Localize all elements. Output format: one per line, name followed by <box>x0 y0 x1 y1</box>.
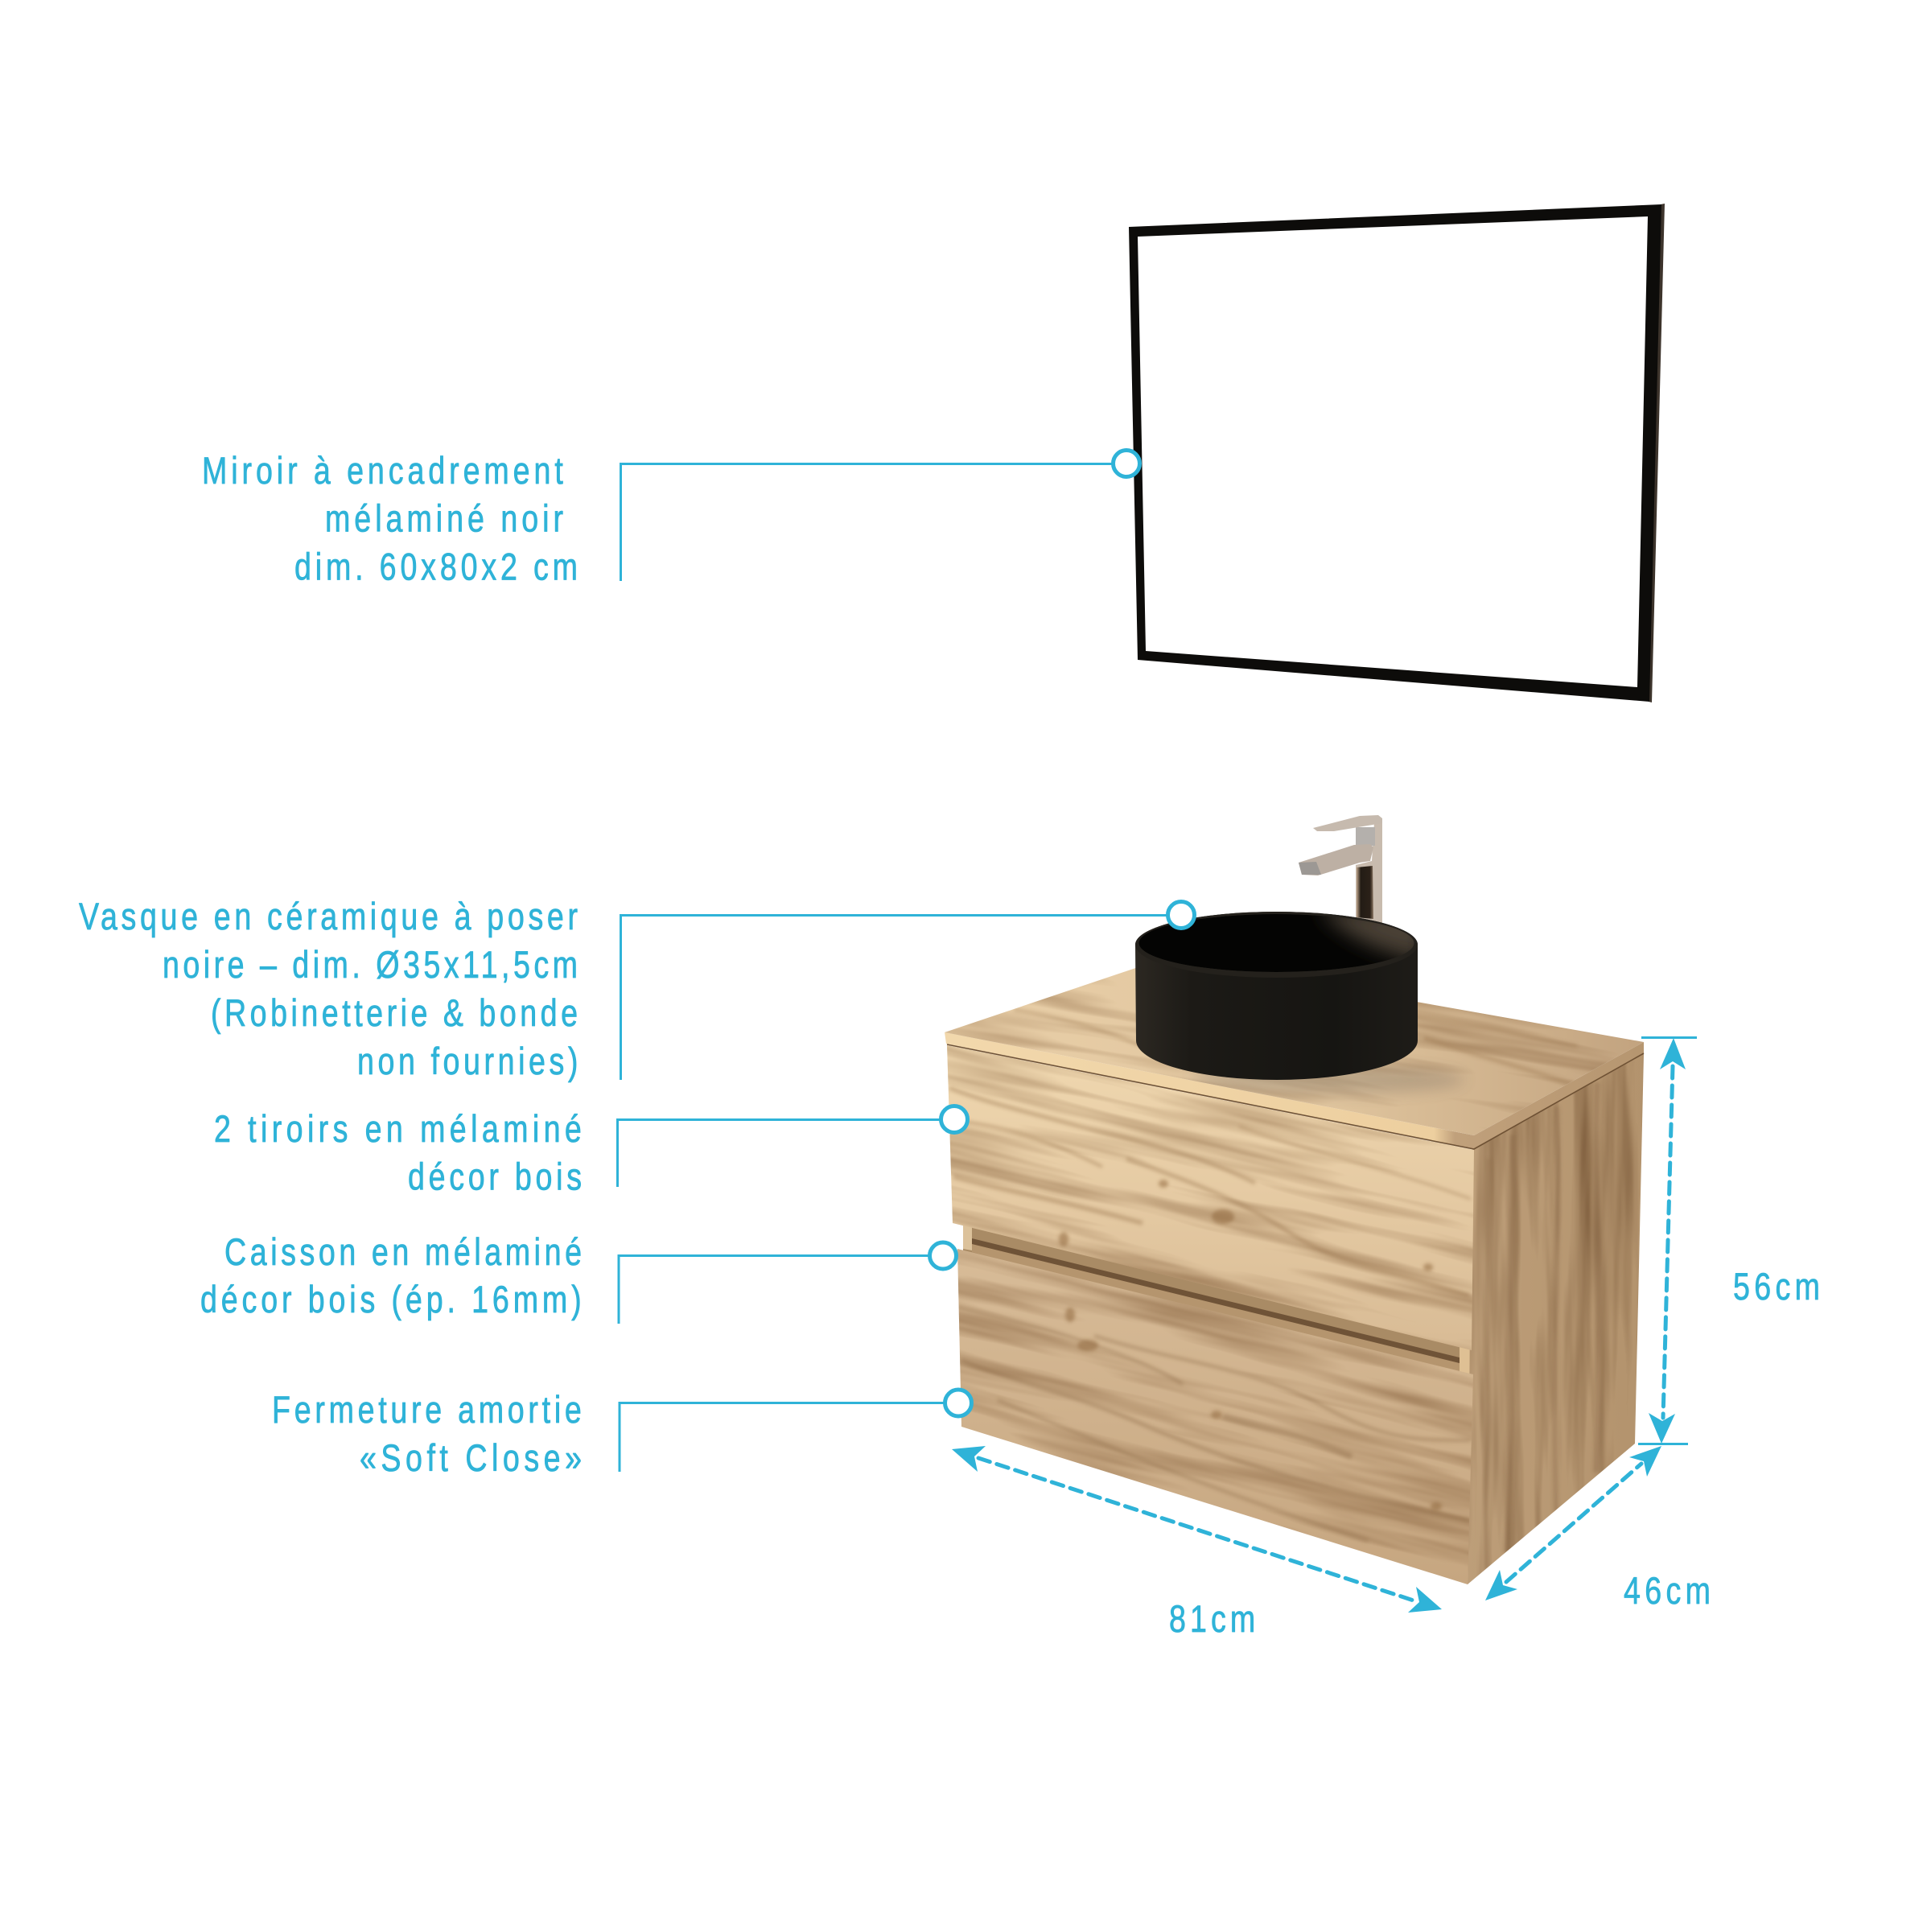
marker tiroirs <box>941 1106 967 1133</box>
mirror <box>1129 204 1665 702</box>
label tiroirs: 2 tiroirs en mélaminé <box>214 1108 582 1151</box>
countertop top face <box>945 968 1644 1135</box>
height ticks <box>1638 1038 1697 1444</box>
label fermeture: «Soft Close» <box>360 1437 582 1480</box>
handle groove <box>963 1219 1474 1378</box>
cabinet recess behind drawers <box>963 1215 1471 1384</box>
depth arrowheads <box>1485 1446 1661 1600</box>
marker miroir <box>1114 451 1139 476</box>
label fermeture <box>272 1389 582 1480</box>
height label: 56cm <box>1733 1266 1820 1308</box>
height arrowheads <box>1649 1038 1686 1444</box>
side panel <box>1464 1046 1649 1593</box>
mirror frame <box>1129 204 1661 702</box>
label vasque: non fournies) <box>357 1040 578 1083</box>
basin interior <box>1139 914 1414 972</box>
faucet dark slot <box>1357 866 1373 919</box>
faucet <box>1299 815 1382 925</box>
marker vasque <box>1168 901 1194 929</box>
marker caisson <box>930 1242 956 1269</box>
label miroir: Miroir à encadrement <box>202 450 563 492</box>
mirror side edge <box>1649 204 1665 702</box>
label vasque: (Robinetterie & bonde <box>211 992 578 1035</box>
label miroir: dim. 60x80x2 cm <box>294 546 578 589</box>
vanity cabinet <box>945 968 1645 1584</box>
leader line fermeture <box>620 1403 958 1472</box>
label miroir: mélaminé noir <box>325 498 563 541</box>
leader line miroir <box>621 463 1126 581</box>
basin shadow on countertop <box>1191 1065 1464 1094</box>
faucet spout tip <box>1299 862 1321 875</box>
callout: tiroirs <box>214 1106 967 1199</box>
lower drawer <box>957 1249 1473 1584</box>
width label: 81cm <box>1169 1598 1255 1641</box>
shadow line under countertop <box>947 1044 1644 1149</box>
label vasque <box>79 896 578 1083</box>
depth dashed line <box>1506 1464 1641 1582</box>
leader line tiroirs <box>618 1120 954 1187</box>
label vasque: Vasque en céramique à poser <box>79 896 578 938</box>
faucet column <box>1356 822 1382 925</box>
countertop front edge <box>945 1032 1644 1149</box>
callout: vasque <box>79 896 1194 1083</box>
height dashed line <box>1663 1066 1673 1418</box>
basin interior lit wall <box>1320 916 1414 961</box>
leader line vasque <box>621 916 1181 1080</box>
leader line caisson <box>619 1255 943 1324</box>
callout: fermeture <box>272 1389 972 1480</box>
label caisson: Caisson en mélaminé <box>224 1231 582 1274</box>
faucet handle <box>1313 815 1382 831</box>
upper drawer <box>947 1045 1474 1350</box>
label caisson <box>200 1231 582 1321</box>
faucet spout <box>1299 844 1373 875</box>
marker fermeture <box>945 1390 972 1416</box>
width arrowheads <box>952 1446 1442 1613</box>
width dashed line <box>978 1458 1416 1601</box>
basin body <box>1135 912 1418 1080</box>
wood knots upper drawer <box>1059 1180 1433 1271</box>
label vasque: noire – dim. Ø35x11,5cm <box>163 944 578 987</box>
dimension: width 81cm <box>952 1446 1442 1641</box>
wood knots lower drawer <box>1065 1308 1442 1510</box>
dimension: depth 46cm <box>1485 1446 1711 1613</box>
faucet neck <box>1356 827 1375 846</box>
label tiroirs <box>214 1108 582 1199</box>
callout: caisson <box>200 1231 956 1324</box>
label miroir <box>202 450 578 589</box>
label caisson: décor bois (ép. 16mm) <box>200 1279 582 1321</box>
depth label: 46cm <box>1624 1570 1711 1613</box>
dimension: height 56cm <box>1638 1038 1820 1444</box>
label tiroirs: décor bois <box>408 1156 582 1199</box>
basin rim <box>1135 912 1418 978</box>
black ceramic basin <box>1135 909 1424 1080</box>
label fermeture: Fermeture amortie <box>272 1389 582 1431</box>
callout: miroir <box>202 450 1139 589</box>
